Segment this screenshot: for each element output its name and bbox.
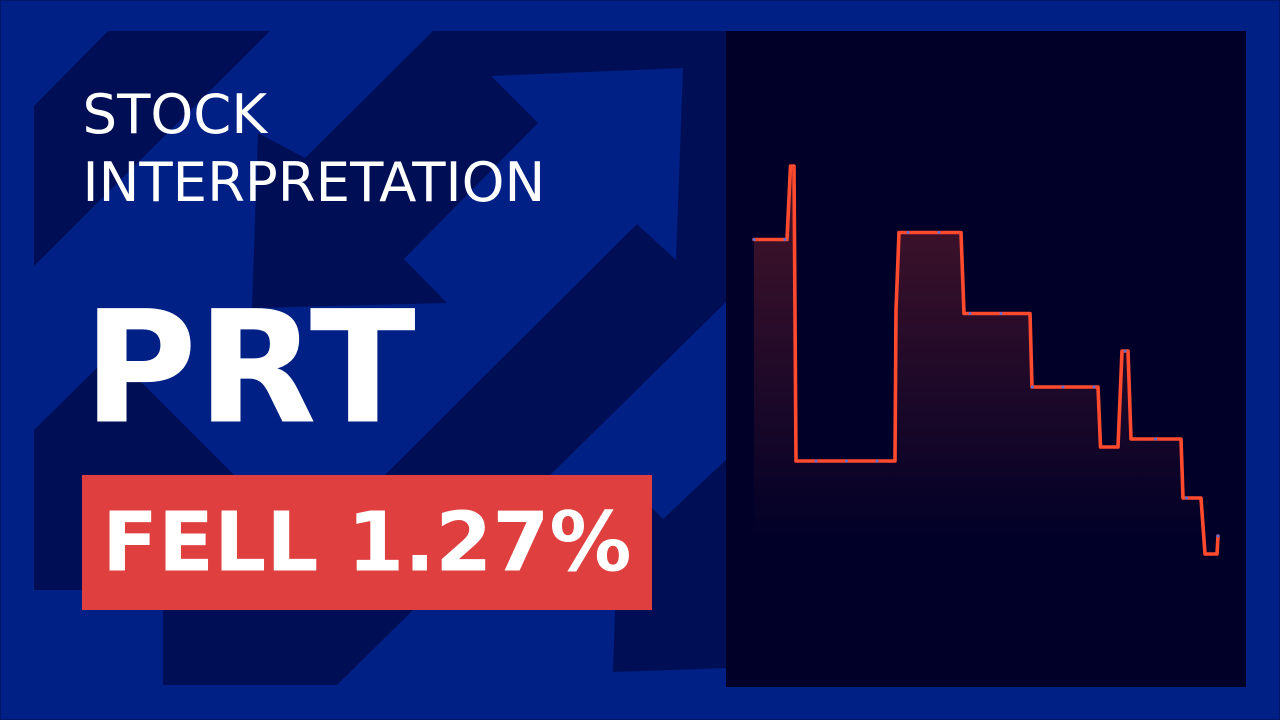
area fill (754, 166, 1218, 687)
change badge (82, 475, 652, 610)
title: INTERPRETATION (82, 150, 545, 214)
chart panel (726, 31, 1246, 687)
ticker: PRT (83, 278, 416, 458)
data points (752, 231, 1220, 538)
background arrows (34, 31, 730, 685)
title (82, 82, 545, 214)
title: STOCK (82, 82, 268, 146)
price line (754, 166, 1218, 554)
change badge: FELL 1.27% (102, 496, 632, 590)
